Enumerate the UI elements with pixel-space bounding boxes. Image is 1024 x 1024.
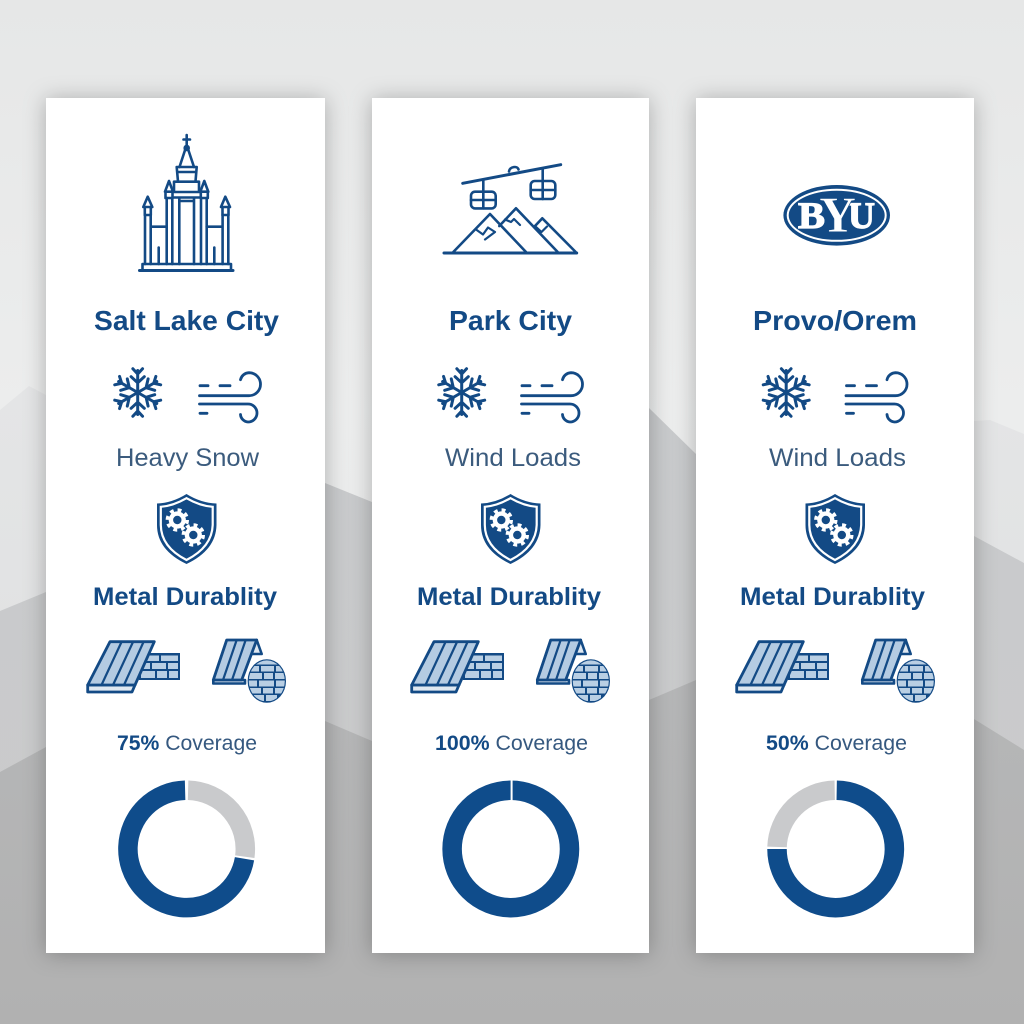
label: Wind Loads: Wind Loads bbox=[769, 444, 906, 472]
icon: BYU oval logo: B bbox=[798, 196, 825, 237]
icon: BYU oval logo bbox=[783, 185, 890, 246]
label: Wind Loads: Wind Loads bbox=[445, 444, 581, 472]
icon: shield with gears bbox=[157, 494, 216, 564]
icon: snowflake bbox=[114, 369, 162, 416]
heading: Salt Lake City: Salt Lake City bbox=[94, 305, 279, 336]
heading: Metal Durablity: Metal Durablity bbox=[417, 583, 601, 611]
heading: Provo/Orem: Provo/Orem bbox=[753, 305, 917, 336]
icon: temple building bbox=[140, 135, 233, 270]
donut chart: 50% bbox=[777, 790, 894, 908]
icon: wind bbox=[522, 373, 582, 422]
icon: ski lift and mountains bbox=[444, 165, 577, 253]
donut chart: 75% bbox=[128, 790, 245, 908]
label: 75% coverage: 75% Coverage bbox=[117, 732, 257, 755]
label: 50% coverage: 50% Coverage bbox=[766, 732, 907, 755]
donut chart: 100% bbox=[452, 779, 570, 908]
icon: shield with gears bbox=[806, 494, 865, 564]
label: 100% coverage: 100% Coverage bbox=[435, 732, 588, 755]
label: Heavy Snow: Heavy Snow bbox=[116, 444, 260, 472]
icon: metal panel over brick circle bbox=[862, 640, 936, 703]
icon: metal panel over brick circle bbox=[213, 640, 287, 703]
panel: Salt Lake City bbox=[46, 98, 325, 953]
icon: metal panel on brick wall bbox=[412, 642, 503, 692]
icon: BYU oval logo: Y bbox=[819, 188, 856, 244]
icon: shield with gears bbox=[481, 494, 540, 564]
icon: snowflake bbox=[762, 369, 810, 416]
icon: BYU oval logo: U bbox=[848, 196, 875, 237]
icon: metal panel on brick wall bbox=[737, 642, 828, 692]
icon: wind bbox=[846, 373, 907, 422]
panel: Provo/Orem bbox=[696, 98, 974, 953]
heading: Metal Durablity: Metal Durablity bbox=[740, 583, 925, 611]
icon: metal panel over brick circle bbox=[537, 640, 611, 703]
icon: wind bbox=[200, 373, 260, 422]
heading: Metal Durablity: Metal Durablity bbox=[93, 583, 277, 611]
icon: metal panel on brick wall bbox=[88, 642, 179, 692]
icon: snowflake bbox=[438, 369, 486, 416]
heading: Park City: Park City bbox=[449, 305, 572, 336]
panel: Park City bbox=[372, 98, 649, 953]
